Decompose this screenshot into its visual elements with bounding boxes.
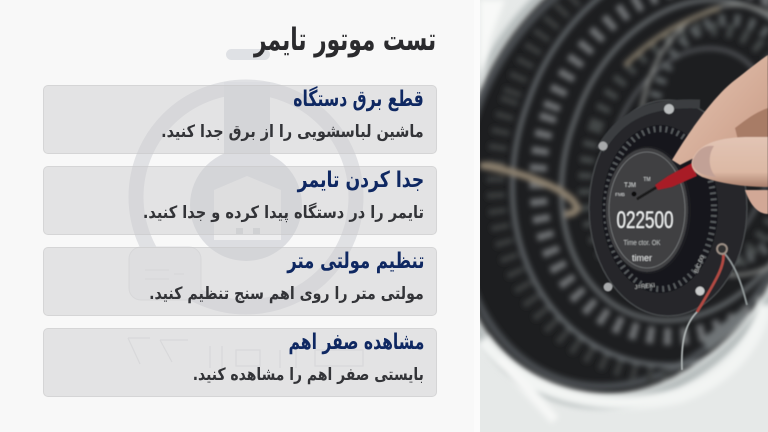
hand <box>672 55 768 214</box>
step 4 text: بایستی صفر اهم را مشاهده کنید. <box>193 365 424 385</box>
step 3 text: مولتی متر را روی اهم سنج تنظیم کنید. <box>149 284 424 304</box>
dial labels <box>615 177 674 263</box>
step 1 text: ماشین لباسشویی را از برق جدا کنید. <box>161 122 424 142</box>
screws <box>664 104 674 114</box>
step 4 heading: مشاهده صفر اهم <box>288 330 424 355</box>
title: تست موتور تایمر <box>254 22 436 58</box>
panel: step 2 <box>43 166 437 235</box>
step 2 text: تایمر را در دستگاه پیدا کرده و جدا کنید. <box>143 203 424 223</box>
timer module: B/C.00 <box>694 254 707 274</box>
step 2 heading: جدا کردن تایمر <box>297 168 424 193</box>
panel: step 3 <box>43 247 437 316</box>
panel: step 4 <box>43 328 437 397</box>
step 1 heading: قطع برق دستگاه <box>294 87 424 112</box>
drum interior <box>480 0 768 397</box>
dial labels: TM <box>643 177 651 183</box>
door rim and shadow <box>443 0 768 409</box>
dial labels: TJM <box>624 183 636 189</box>
timer module: J=REKI <box>634 283 656 291</box>
watermark logo <box>128 49 364 368</box>
photo: multimeter probing washing machine timer <box>480 0 768 432</box>
probe <box>637 163 697 199</box>
timer module <box>589 100 747 316</box>
title underline <box>226 49 270 60</box>
dial face <box>606 148 688 272</box>
panel: step 1 <box>43 85 437 154</box>
dial labels: FMB <box>615 192 625 197</box>
white door rim <box>482 305 766 420</box>
wires <box>682 244 747 370</box>
digital readout: 022500 <box>616 207 674 234</box>
dial labels: timer <box>632 253 652 263</box>
dial labels: Time ctor. OK <box>624 240 661 247</box>
step 3 heading: تنظیم مولتی متر <box>287 249 424 274</box>
top-left door corner <box>480 0 505 90</box>
